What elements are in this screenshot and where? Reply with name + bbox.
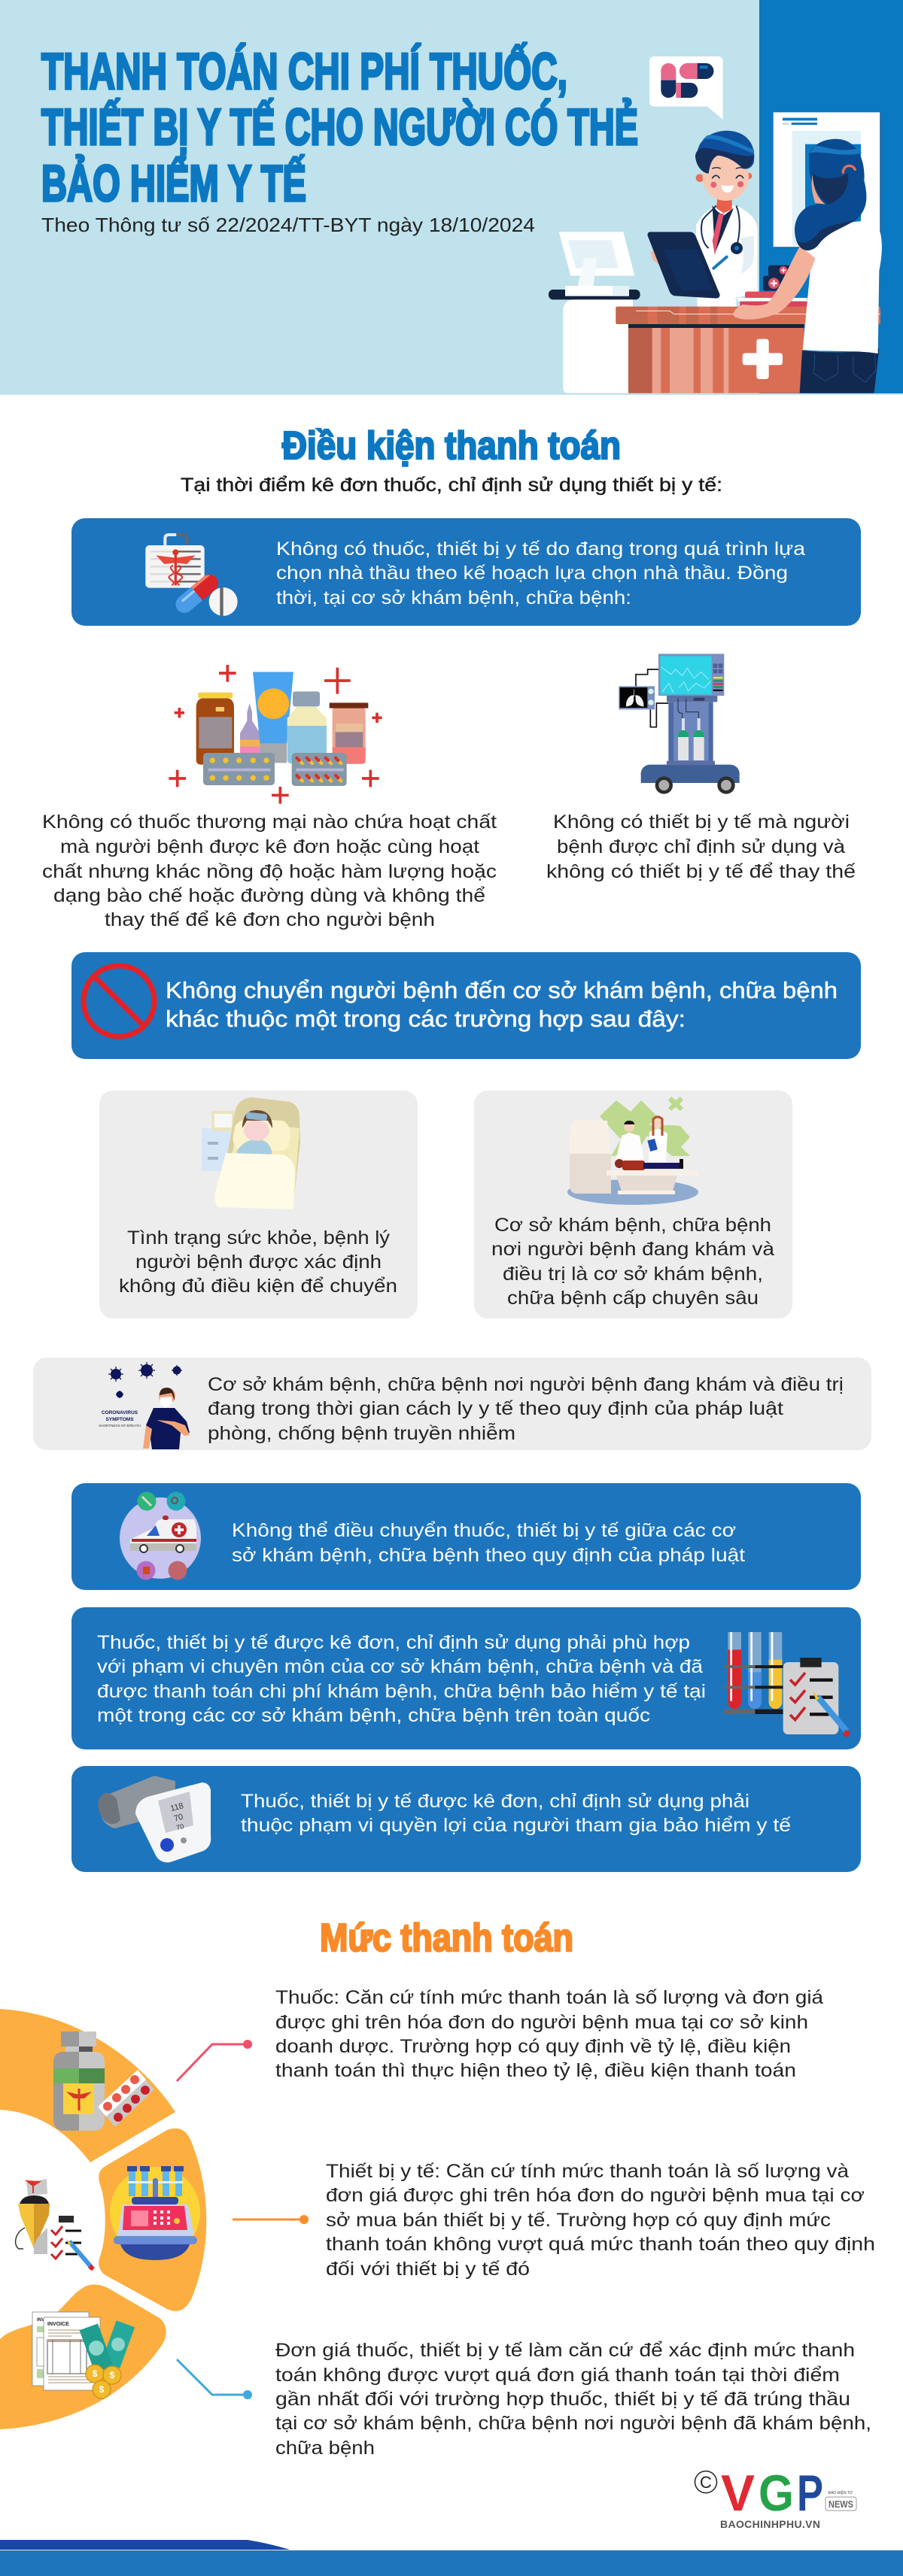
text: medicine payment: doanh dược. Trường hợp có quy định về tỷ lệ, điều kiện <box>275 2036 791 2057</box>
icon: masked man with virus: SHORTNESS OF BREATH <box>99 1424 141 1428</box>
panel: cannot transfer medicine <box>71 1483 861 1590</box>
panel text <box>241 1791 791 1836</box>
logo: VGP News: BÁO ĐIỆN TỬ <box>829 2490 853 2496</box>
text: medicine payment <box>275 1987 823 2081</box>
icon: invoices, banknotes and coins: $ <box>93 2368 98 2379</box>
icon: masked man with virus: CORONAVIRUS <box>102 1410 138 1415</box>
text: no commercial medicine: thay thế để kê đơn cho người bệnh <box>105 909 435 930</box>
icon: blood pressure monitor: 70 <box>175 1822 184 1831</box>
card: medical quarantine <box>33 1358 871 1450</box>
icon: masked man with virus <box>99 1362 190 1449</box>
logo: VGP News: BAOCHINHPHU.VN <box>720 2518 820 2530</box>
panel text: sở khám bệnh, chữa bệnh theo quy định của pháp luật <box>232 1545 745 1566</box>
icon: invoices, banknotes and coins: $ <box>99 2384 105 2395</box>
panel: insurance benefit scope <box>71 1766 861 1872</box>
text: device payment: đơn giá được ghi trên hóa đơn do người bệnh mua tại cơ <box>326 2185 865 2206</box>
card text: nơi người bệnh đang khám và <box>491 1239 774 1260</box>
icon: blood pressure monitor: 70 <box>173 1813 184 1823</box>
panel text: một trong các cơ sở khám bệnh, chữa bệnh trên toàn quốc <box>97 1705 650 1726</box>
title: THANH TOÁN CHI PHÍ THUỐC, <box>41 42 567 100</box>
panel text: Không chuyển người bệnh đến cơ sở khám bệnh, chữa bệnh <box>166 977 838 1003</box>
icon: nurse with checklist <box>16 2179 93 2269</box>
arrow: device connector <box>233 2215 309 2224</box>
icon: ambulance in circle <box>120 1492 201 1579</box>
title <box>41 42 638 212</box>
title: THIẾT BỊ Y TẾ CHO NGƯỜI CÓ THẺ <box>41 98 638 156</box>
text: device payment <box>326 2161 875 2280</box>
panel text: chọn nhà thầu theo kế hoạch lựa chọn nhà thầu. Đồng <box>276 563 788 584</box>
text: device payment: Thiết bị y tế: Căn cứ tính mức thanh toán là số lượng và <box>326 2161 849 2182</box>
icon: lab machine <box>110 2166 200 2260</box>
icon: invoices, banknotes and coins: INVOICE <box>37 2318 56 2323</box>
logo: VGP News: P <box>797 2465 823 2522</box>
text: device payment: đối với thiết bị y tế đó <box>326 2259 530 2280</box>
doctor <box>648 131 758 307</box>
card text: chữa bệnh cấp chuyên sâu <box>507 1288 759 1309</box>
text: unit price: gần nhất đối với trường hợp thuốc, thiết bị y tế đã trúng thầu <box>275 2389 850 2410</box>
segment: medical device <box>99 2128 206 2311</box>
icon: prohibition sign <box>84 966 154 1036</box>
icon: blood pressure monitor <box>98 1776 211 1862</box>
text: medicine payment: Thuốc: Căn cứ tính mức thanh toán là số lượng và đơn giá <box>275 1987 823 2008</box>
card: patient health condition <box>99 1091 418 1318</box>
patient <box>734 139 882 393</box>
panel text: Không có thuốc, thiết bị y tế do đang trong quá trình lựa <box>276 539 805 560</box>
icon: blood pressure monitor: 118 <box>169 1801 184 1813</box>
text: no replacement device: không có thiết bị y tế để thay thế <box>546 861 856 882</box>
text: no commercial medicine <box>42 812 497 930</box>
card text: Tình trạng sức khỏe, bệnh lý <box>127 1227 391 1249</box>
card text <box>119 1227 397 1297</box>
panel: scope of expertise <box>71 1607 861 1749</box>
text: no replacement device: bệnh được chỉ định sử dụng và <box>557 836 845 857</box>
text: no replacement device: Không có thiết bị y tế mà người <box>553 812 850 833</box>
panel text: Không thể điều chuyển thuốc, thiết bị y tế giữa các cơ <box>232 1520 736 1541</box>
icon: sick patient in bed <box>202 1097 300 1209</box>
text: medicine payment: thanh toán thì thực hiện theo tỷ lệ, điều kiện thanh toán <box>275 2060 796 2081</box>
subtitle: Theo Thông tư số 22/2024/TT-BYT ngày 18/10/2024 <box>41 214 535 236</box>
panel text <box>97 1632 706 1726</box>
text: unit price: toán không được vượt quá đơn giá thanh toán tại thời điểm <box>275 2365 840 2386</box>
text: unit price: Đơn giá thuốc, thiết bị y tế làm căn cứ để xác định mức thanh <box>275 2340 855 2361</box>
card text <box>208 1374 844 1444</box>
text: no commercial medicine: Không có thuốc thương mại nào chứa hoạt chất <box>42 812 497 833</box>
poster on wall <box>774 112 880 247</box>
card text: phòng, chống bệnh truyền nhiễm <box>208 1422 515 1444</box>
arrow: unit price connector <box>177 2359 252 2399</box>
text: unit price: tại cơ sở khám bệnh, chữa bệnh nơi người bệnh đã khám bệnh, <box>275 2413 871 2434</box>
text: no commercial medicine: mà người bệnh được kê đơn hoặc cùng hoạt <box>60 836 479 857</box>
heading: Điều kiện thanh toán: Điều kiện thanh toán <box>282 424 621 468</box>
panel text: với phạm vi chuyên môn của cơ sở khám bệnh, chữa bệnh và đã <box>97 1656 703 1677</box>
icon: masked man with virus: SYMPTOMS <box>105 1417 134 1422</box>
card text: Cơ sở khám bệnh, chữa bệnh nơi người bệnh đang khám và điều trị <box>208 1374 844 1395</box>
panel text: thuộc phạm vi quyền lợi của người tham gia bảo hiểm y tế <box>241 1815 791 1836</box>
counter with cross <box>616 307 880 393</box>
computer monitor <box>549 232 640 393</box>
text: device payment: sở mua bán thiết bị y tế. Trường hợp có quy định mức <box>326 2210 831 2231</box>
text: no replacement device <box>546 812 856 882</box>
logo: VGP News: NEWS <box>829 2499 853 2510</box>
panel text <box>276 539 805 608</box>
card text: điều trị là cơ sở khám bệnh, <box>503 1264 763 1285</box>
icon: ventilator machine <box>619 654 740 794</box>
illustration: doctor and patient at counter <box>549 56 882 393</box>
segment: medicine <box>0 2009 175 2162</box>
title: BẢO HIỂM Y TẾ <box>41 154 306 212</box>
card text: Cơ sở khám bệnh, chữa bệnh <box>494 1215 771 1236</box>
icon: invoices, banknotes and coins <box>32 2312 135 2399</box>
panel text <box>232 1520 745 1566</box>
text: unit price: chữa bệnh <box>275 2438 375 2459</box>
card text: người bệnh được xác định <box>135 1252 382 1273</box>
heading: Mức thanh toán: Mức thanh toán <box>320 1916 573 1960</box>
panel text: khác thuộc một trong các trường hợp sau đây: <box>166 1006 686 1032</box>
panel text: thời, tại cơ sở khám bệnh, chữa bệnh: <box>276 587 631 608</box>
footer band <box>0 2540 903 2576</box>
icon: MRI scanner with doctors <box>567 1097 698 1205</box>
diagram: payment level segments <box>0 2009 206 2429</box>
card text: không đủ điều kiện để chuyển <box>119 1276 397 1297</box>
medicine boxes and books <box>737 265 807 307</box>
header banner <box>0 0 903 395</box>
text: medicine payment: được ghi trên hóa đơn do người bệnh mua tại cơ sở kinh <box>275 2012 808 2033</box>
arrow: medicine connector <box>177 2040 252 2081</box>
text: no commercial medicine: dạng bào chế hoặc đường dùng và không thể <box>53 885 485 906</box>
panel text: được thanh toán chi phí khám bệnh, chữa bệnh bảo hiểm y tế tại <box>97 1681 706 1702</box>
logo: VGP News: C <box>700 2473 712 2492</box>
logo: VGP News: V <box>721 2465 755 2522</box>
icon: invoices, banknotes and coins: $ <box>110 2370 115 2380</box>
icon: medicine bottle and blister <box>53 2031 154 2131</box>
panel text: Thuốc, thiết bị y tế được kê đơn, chỉ định sử dụng phải phù hợp <box>97 1632 690 1653</box>
icon: speech bubble with pills <box>649 56 723 120</box>
panel: do not transfer patient <box>71 952 861 1059</box>
text: unit price <box>275 2340 871 2459</box>
icon: test tubes and checklist <box>724 1632 849 1735</box>
card text <box>491 1215 774 1309</box>
subheading: Tại thời điểm kê đơn thuốc, chỉ định sử dụng thiết bị y tế: <box>181 475 722 496</box>
panel text: Thuốc, thiết bị y tế được kê đơn, chỉ định sử dụng phải <box>241 1791 749 1812</box>
segment: invoices <box>0 2285 166 2429</box>
logo: VGP News <box>695 2465 856 2530</box>
panel text <box>166 977 838 1032</box>
logo: VGP News: G <box>759 2465 794 2522</box>
panel: no medicine during bidding <box>71 518 861 626</box>
icon: medicine products <box>169 665 382 804</box>
icon: medical case and capsule <box>145 535 238 617</box>
card: specialised facility <box>474 1091 792 1318</box>
text: device payment: thanh toán không vượt quá mức thanh toán theo quy định <box>326 2234 875 2255</box>
icon: invoices, banknotes and coins: INVOICE <box>47 2322 69 2327</box>
text: no commercial medicine: chất nhưng khác nồng độ hoặc hàm lượng hoặc <box>42 861 497 882</box>
card text: đang trong thời gian cách ly y tế theo quy định của pháp luật <box>208 1398 783 1419</box>
